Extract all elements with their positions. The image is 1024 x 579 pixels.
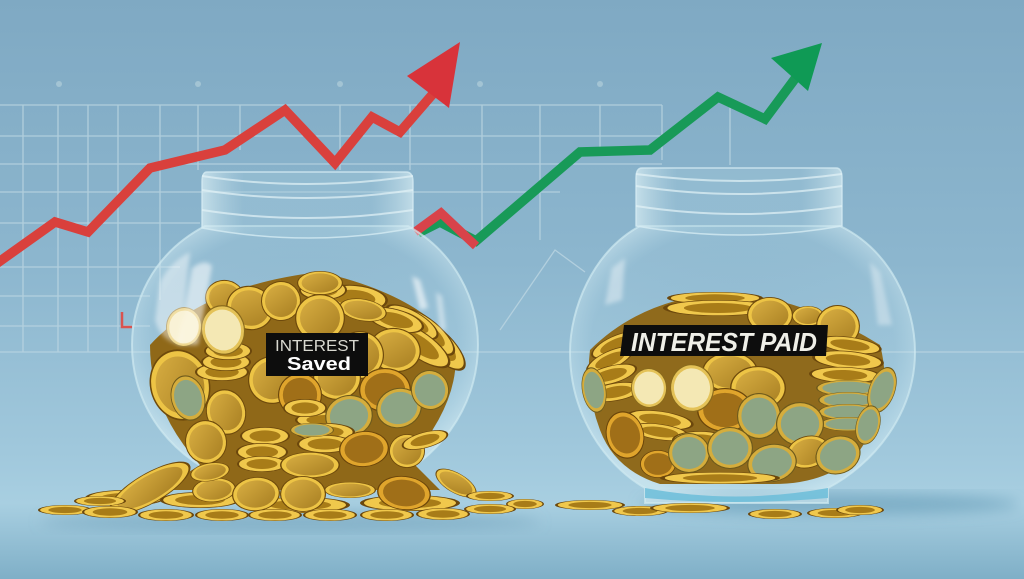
- jar: interest paid: [555, 168, 915, 519]
- small dots on chart backdrop: [56, 81, 603, 87]
- glass highlights: [605, 258, 892, 325]
- small red mark on chart: [122, 312, 132, 327]
- label: interest saved: INTEREST: [275, 338, 360, 355]
- jar body: [570, 226, 915, 503]
- floor shadows: [40, 493, 1020, 531]
- jar neck: [202, 172, 413, 238]
- jar body: [132, 226, 478, 482]
- jar: interest saved: [38, 172, 544, 524]
- grid chart backdrop: [0, 105, 1024, 352]
- glass highlights: [155, 252, 446, 345]
- green rising arrow: [415, 43, 822, 246]
- red rising arrow: [0, 42, 460, 264]
- coins in jar: [38, 271, 544, 524]
- label: interest saved: [266, 333, 368, 376]
- loose coins on floor: [555, 500, 884, 519]
- coin pile backing: [150, 272, 456, 490]
- coins in jar: [578, 292, 902, 486]
- coin pile backing: [589, 293, 884, 484]
- loose coins on floor: [85, 490, 165, 506]
- red arrow fragment: [415, 213, 476, 246]
- jar base: [645, 488, 828, 502]
- jar neck: [636, 168, 842, 235]
- label: interest saved: Saved: [287, 354, 351, 374]
- label: interest paid: INTEREST PAID: [631, 327, 817, 357]
